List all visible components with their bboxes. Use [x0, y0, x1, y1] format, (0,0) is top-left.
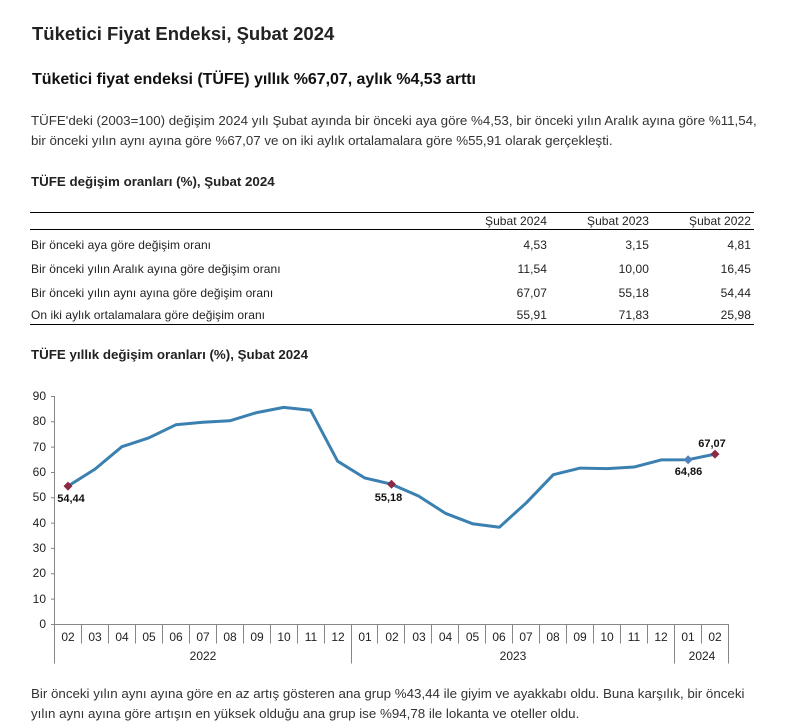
data labels: 64,86 [675, 466, 702, 478]
x axis month labels: 10 [277, 630, 291, 644]
table header row: Şubat 2024 [485, 214, 547, 228]
data labels: 55,18 [375, 492, 402, 504]
x axis year labels: 2023 [500, 649, 527, 663]
row: annual change [31, 286, 751, 300]
y axis labels: 10 [33, 592, 46, 606]
x axis month labels: 02 [708, 630, 722, 644]
row: monthly change: 4,81 [727, 238, 751, 252]
marker: February 2023 [387, 480, 396, 489]
row: twelve-month average change [31, 308, 751, 322]
table header row: Şubat 2022 [689, 214, 751, 228]
intro paragraph [31, 113, 757, 148]
x axis month labels: 06 [492, 630, 506, 644]
table header row: Şubat 2023 [587, 214, 649, 228]
y axis labels: 30 [33, 541, 46, 555]
marker: February 2022 [64, 482, 72, 491]
x axis month labels: 07 [196, 630, 210, 644]
row: annual change: 67,07 [517, 286, 547, 300]
title: Tüketici Fiyat Endeksi, Şubat 2024 [32, 23, 334, 44]
data labels: 67,07 [698, 438, 726, 450]
y axis labels: 80 [33, 414, 46, 428]
closing paragraph: Bir önceki yılın aynı ayına göre en az artış gösteren ana grup %43,44 ile giyim ve ayakkabı oldu. Buna karşılık, bir önceki [31, 686, 744, 701]
row: twelve-month average change: 71,83 [619, 308, 649, 322]
x axis month labels: 01 [681, 630, 695, 644]
x axis month labels: 08 [546, 630, 560, 644]
x axis month labels: 04 [439, 630, 452, 644]
x axis month labels: 10 [600, 630, 614, 644]
data labels: 54,44 [57, 493, 86, 505]
marker: January 2024 [684, 455, 693, 464]
row: annual change: 54,44 [721, 286, 751, 300]
table header row [485, 214, 751, 228]
row: monthly change [31, 238, 751, 252]
subtitle: Tüketici fiyat endeksi (TÜFE) yıllık %67,07, aylık %4,53 arttı [32, 71, 476, 88]
x axis month labels: 03 [412, 630, 426, 644]
marker: February 2024 [710, 450, 720, 459]
x axis month labels: 03 [88, 630, 102, 644]
row: twelve-month average change: On iki aylık ortalamalara göre değişim oranı [31, 308, 265, 322]
x axis month labels [61, 630, 722, 644]
row: change versus December: 16,45 [721, 262, 751, 276]
row: change versus December: Bir önceki yılın Aralık ayına göre değişim oranı [31, 262, 281, 276]
table heading: TÜFE değişim oranları (%), Şubat 2024 [31, 174, 275, 189]
y axis labels: 20 [33, 566, 46, 580]
x axis year labels [190, 649, 716, 663]
closing paragraph: yılın aynı ayına göre artışın en yüksek olduğu ana grup ise %94,78 ile lokanta ve oteller oldu. [31, 706, 579, 721]
x axis month labels: 04 [115, 630, 129, 644]
data labels [57, 438, 726, 505]
row: annual change: 55,18 [619, 286, 649, 300]
data line [68, 407, 715, 527]
y axis labels: 60 [33, 465, 46, 479]
x axis month labels: 02 [385, 630, 399, 644]
row: twelve-month average change: 55,91 [517, 308, 547, 322]
y axis labels: 50 [33, 490, 46, 504]
x axis month labels: 09 [573, 630, 587, 644]
row: change versus December [31, 262, 751, 276]
row: monthly change: 3,15 [625, 238, 649, 252]
intro paragraph: bir önceki yılın aynı ayına göre %67,07 ve on iki aylık ortalamalara göre %55,91 olarak gerçekleşti. [31, 133, 613, 148]
x axis month labels: 01 [358, 630, 372, 644]
x axis month labels: 11 [305, 630, 318, 644]
x axis month labels: 12 [331, 630, 345, 644]
closing paragraph [31, 686, 744, 721]
row: monthly change: 4,53 [523, 238, 547, 252]
x axis month labels: 08 [223, 630, 237, 644]
y axis labels [33, 389, 46, 631]
y axis [51, 396, 54, 624]
x axis month labels: 07 [519, 630, 533, 644]
chart heading: TÜFE yıllık değişim oranları (%), Şubat 2024 [31, 347, 308, 362]
x axis year labels: 2024 [689, 649, 716, 663]
y axis labels: 90 [33, 389, 46, 403]
x axis year labels: 2022 [190, 649, 217, 663]
x axis month labels: 09 [250, 630, 264, 644]
x axis month labels: 12 [654, 630, 668, 644]
data table [30, 212, 754, 325]
y axis labels: 40 [33, 516, 46, 530]
x axis month labels: 11 [628, 630, 641, 644]
y axis labels: 70 [33, 440, 46, 454]
x axis month labels: 05 [466, 630, 479, 644]
x axis [54, 624, 728, 664]
row: twelve-month average change: 25,98 [721, 308, 751, 322]
row: change versus December: 11,54 [518, 262, 547, 276]
row: annual change: Bir önceki yılın aynı ayına göre değişim oranı [31, 286, 273, 300]
row: monthly change: Bir önceki aya göre değişim oranı [31, 238, 211, 252]
x axis month labels: 02 [61, 630, 75, 644]
x axis month labels: 05 [142, 630, 156, 644]
intro paragraph: TÜFE'deki (2003=100) değişim 2024 yılı Şubat ayında bir önceki aya göre %4,53, bir önceki yılın Aralık ayına göre %11,54, [31, 113, 757, 128]
x axis month labels: 06 [169, 630, 183, 644]
row: change versus December: 10,00 [619, 262, 649, 276]
y axis labels: 0 [39, 617, 46, 631]
